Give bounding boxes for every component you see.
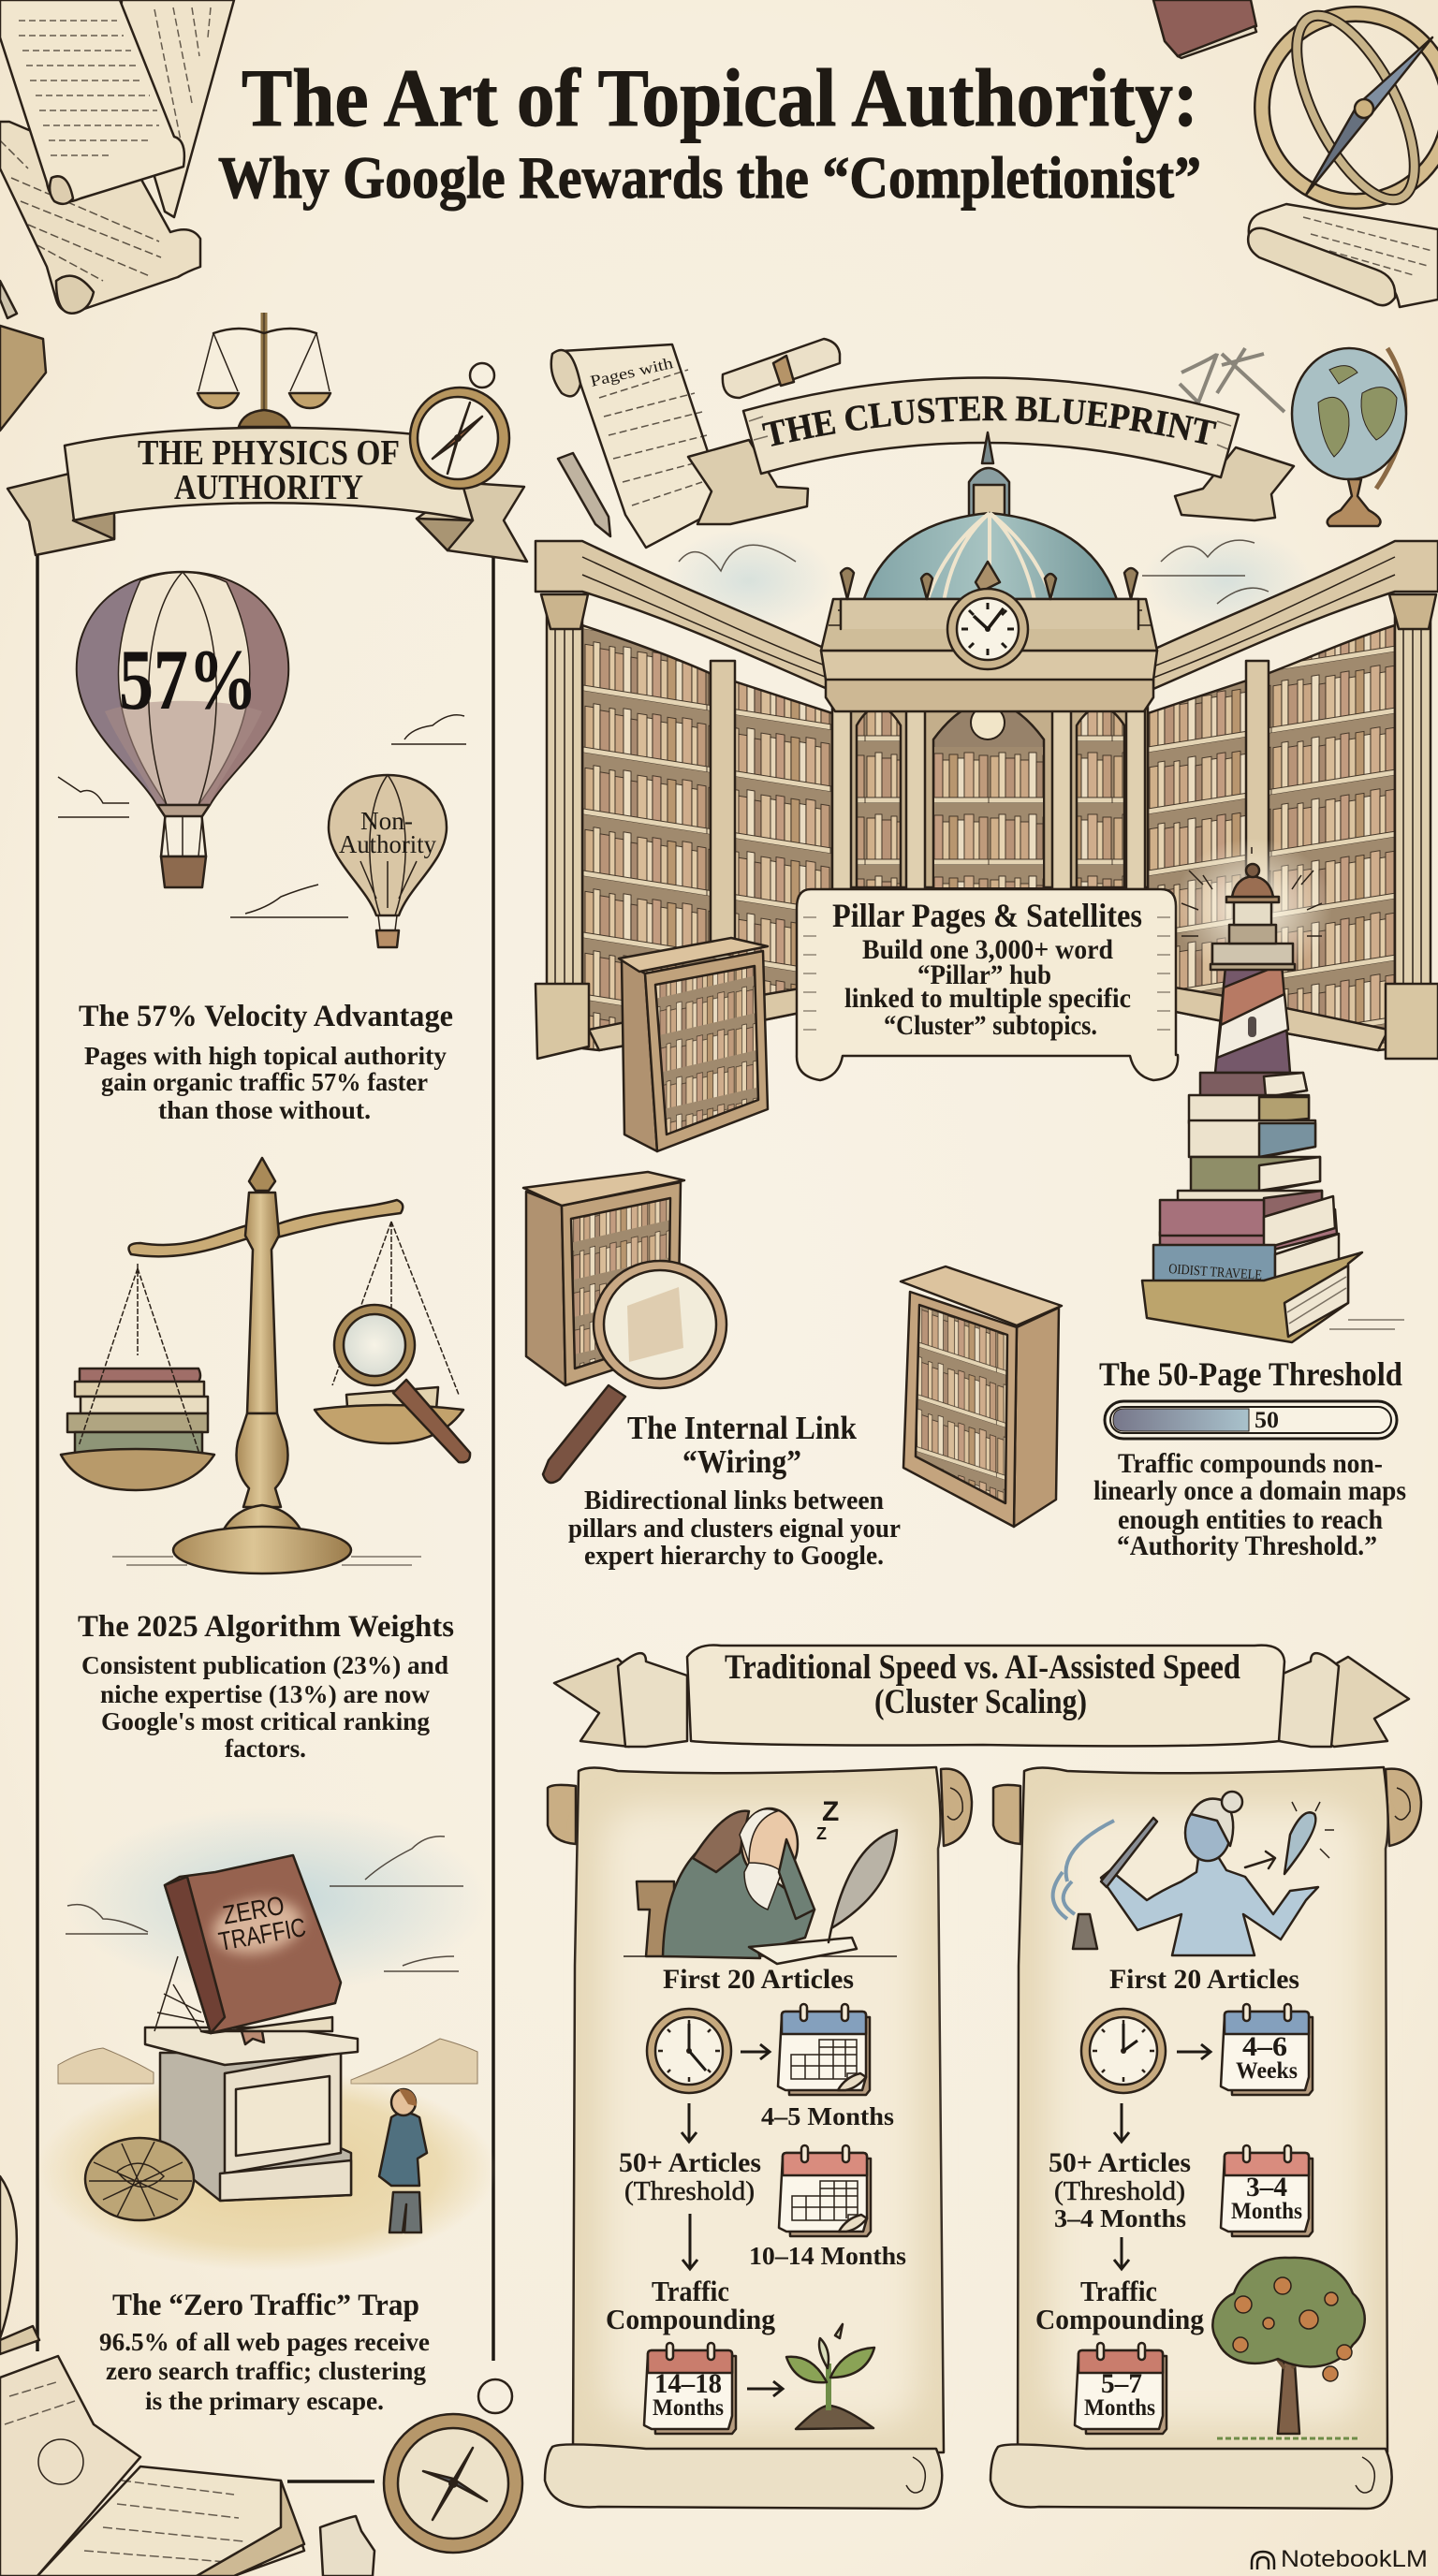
icon: tired scholar: Z	[822, 1796, 839, 1827]
illustration: central clock tower	[821, 562, 1157, 889]
panel: cluster blueprint library	[522, 337, 1438, 1571]
text: 57% velocity advantage	[79, 1000, 453, 1124]
decoration: page, diploma, pencil, calipers: Pages with	[589, 354, 675, 390]
text: 2025 algorithm weights: Google's most critical ranking	[101, 1707, 431, 1735]
scroll parchment	[545, 1767, 972, 2509]
heading banner: traditional vs AI-assisted speed: Traditional Speed vs. AI-Assisted Speed	[725, 1648, 1240, 1687]
icon: zero traffic book: TRAFFIC	[216, 1912, 308, 1956]
icon: lighthouse on a pile of books: OIDIST TRAVELE	[1168, 1262, 1263, 1283]
text: 2025 algorithm weights	[78, 1610, 454, 1763]
text and bar: 50-page threshold: The 50-Page Threshold	[1099, 1355, 1402, 1393]
callout: pillar pages and satellites: “Cluster” subtopics.	[884, 1010, 1097, 1041]
text: first 20 articles: First 20 Articles	[663, 1964, 854, 1995]
icon: calendar 14-18 months: Months	[653, 2395, 724, 2421]
icon: clock	[647, 2009, 731, 2093]
label: traffic compounding	[606, 2275, 775, 2335]
callout: pillar pages and satellites	[797, 889, 1178, 1080]
icon: calendar 4-6 weeks: Weeks	[1236, 2058, 1298, 2084]
text: 57% velocity advantage: than those without.	[158, 1096, 371, 1124]
scroll parchment	[990, 1767, 1421, 2509]
text: 2025 algorithm weights: factors.	[225, 1734, 306, 1763]
illustration: left library wing	[536, 541, 832, 1059]
pedestal	[145, 2027, 358, 2201]
logo: NotebookLM: NotebookLM	[1281, 2546, 1428, 2572]
text and bar: 50-page threshold: enough entities to reach	[1118, 1504, 1383, 1535]
panel border lines	[37, 538, 493, 2481]
text: internal link wiring: “Wiring”	[682, 1443, 801, 1480]
decoration: top-left scrolls and book	[0, 0, 234, 431]
icon: AI muse figure	[1053, 1792, 1334, 1955]
text: internal link wiring	[568, 1410, 901, 1571]
icon: balance scale with books and magnifier	[61, 1158, 470, 1573]
label: traffic compounding	[1035, 2275, 1204, 2335]
icon: cobweb	[154, 1956, 204, 2031]
panel: traditional speed scroll	[545, 1767, 972, 2509]
illustration: right library wing	[1148, 541, 1438, 1059]
text: zero traffic trap	[99, 2289, 430, 2415]
panel: the physics of authority	[7, 313, 527, 2481]
text: 57% velocity advantage: gain organic traffic 57% faster	[101, 1068, 428, 1096]
text: internal link wiring: The Internal Link	[627, 1410, 857, 1446]
text: internal link wiring: expert hierarchy to Google.	[584, 1541, 884, 1571]
text: zero traffic trap: is the primary escape.	[145, 2387, 384, 2415]
icon: small balance scale	[198, 313, 330, 427]
text: internal link wiring: Bidirectional links between	[584, 1486, 884, 1515]
icon: big balloon 57%: 57%	[119, 632, 257, 727]
icon: small balloon non-authority: Authority	[339, 830, 436, 858]
callout: pillar pages and satellites: linked to multiple specific	[844, 983, 1131, 1014]
icon: calendar 5-7 months: 5–7	[1101, 2368, 1142, 2399]
text: first 20 articles: First 20 Articles	[1109, 1964, 1299, 1995]
icon: calendar 5-7 months	[1075, 2343, 1167, 2434]
panel: AI-assisted speed scroll	[990, 1767, 1421, 2509]
icon: orange tree	[1212, 2258, 1365, 2438]
label: 50+ articles threshold 3-4 months: 50+ Articles	[1049, 2147, 1191, 2178]
label: traffic compounding: Compounding	[606, 2303, 775, 2335]
arrow: down	[1114, 2103, 1129, 2142]
callout: pillar pages and satellites: Pillar Pages & Satellites	[832, 897, 1142, 934]
heading banner: traditional vs AI-assisted speed	[554, 1646, 1409, 1747]
title: Why Google Rewards the “Completionist”	[218, 145, 1201, 211]
illustration: standalone bookcase 2	[523, 1172, 684, 1385]
label: 50+ articles threshold 3-4 months: 3–4 Months	[1054, 2204, 1186, 2232]
icon: clock	[1081, 2009, 1166, 2093]
icon: calendar 5-7 months: Months	[1084, 2395, 1155, 2421]
heading banner: the physics of authority: THE PHYSICS OF	[138, 433, 400, 473]
icon: calendar 3-4 months: Months	[1231, 2199, 1302, 2224]
heading banner: traditional vs AI-assisted speed: (Cluster Scaling)	[874, 1683, 1087, 1721]
text: zero traffic trap: zero search traffic; clustering	[106, 2357, 427, 2385]
icon: calendar 4-6 weeks: 4–6	[1242, 2031, 1287, 2062]
illustration: standalone bookcase 3	[901, 1266, 1062, 1527]
label: 50+ articles threshold: (Threshold)	[624, 2176, 755, 2206]
text: 57% velocity advantage: Pages with high topical authority	[84, 1042, 447, 1070]
icon: big balloon 57%	[77, 572, 288, 887]
text and bar: 50-page threshold	[1093, 1355, 1406, 1561]
icons: clouds around balloons	[58, 715, 466, 917]
label: 50+ articles threshold 3-4 months: (Threshold)	[1054, 2176, 1185, 2206]
arrow: clock to calendar	[1177, 2044, 1211, 2059]
label: 50+ articles threshold: 50+ Articles	[619, 2147, 761, 2178]
callout: pillar pages and satellites: Build one 3,000+ word	[862, 934, 1113, 965]
icon: sprout	[786, 2324, 874, 2429]
arrow: calendar to sprout	[747, 2381, 783, 2396]
arrow: down to compounding	[682, 2214, 697, 2269]
icon: big magnifying glass	[543, 1261, 726, 1483]
title	[218, 53, 1201, 211]
icon: zero traffic book	[165, 1855, 341, 2044]
text and bar: 50-page threshold: Traffic compounds non-	[1118, 1448, 1383, 1479]
icon: tired scholar: Z	[816, 1824, 827, 1843]
decoration: page, diploma, pencil, calipers	[551, 339, 1284, 548]
icon: calendar 14-18 months: 14–18	[654, 2368, 722, 2399]
text: 2025 algorithm weights: Consistent publication (23%) and	[81, 1651, 448, 1679]
icon: pocket compass	[410, 363, 509, 489]
icon: calendar 3-4 months	[1221, 2145, 1313, 2236]
icon: calendar 3-4 months: 3–4	[1246, 2172, 1287, 2203]
decoration: open book bottom left	[0, 2176, 304, 2576]
label: traffic compounding: Traffic	[652, 2275, 729, 2307]
illustration: zero traffic desert	[37, 1807, 496, 2271]
title: The Art of Topical Authority:	[242, 53, 1198, 144]
label: 10-14 months: 10–14 Months	[749, 2242, 906, 2270]
arrow: down to compounding	[1114, 2237, 1129, 2269]
text: zero traffic trap: 96.5% of all web pages receive	[99, 2328, 430, 2356]
heading banner: the cluster blueprint	[687, 376, 1296, 526]
icon: calendar 4-6 weeks	[1221, 2004, 1313, 2095]
icon: bottom pocket compass	[320, 2379, 522, 2576]
text: 2025 algorithm weights: The 2025 Algorithm Weights	[78, 1610, 454, 1644]
callout: pillar pages and satellites: “Pillar” hub	[917, 959, 1051, 990]
heading banner: the cluster blueprint: THE CLUSTER BLUEPRINT	[762, 396, 1217, 446]
icon: tired scholar	[624, 1796, 897, 1964]
illustration: dome and lantern	[856, 432, 1125, 640]
icon: lighthouse on a pile of books	[1142, 838, 1404, 1342]
illustration: standalone bookcase 1	[619, 938, 768, 1151]
text: zero traffic trap: The “Zero Traffic” Trap	[112, 2289, 419, 2322]
heading banner: the physics of authority: AUTHORITY	[174, 468, 363, 507]
text and bar: 50-page threshold: “Authority Threshold.”	[1117, 1530, 1377, 1561]
label: 50+ articles threshold	[619, 2147, 761, 2206]
label: traffic compounding: Compounding	[1035, 2303, 1204, 2335]
heading banner: the physics of authority	[7, 428, 527, 562]
arrow: clock to calendar	[741, 2044, 770, 2059]
arrow: down	[682, 2103, 697, 2142]
text: 57% velocity advantage: The 57% Velocity Advantage	[79, 1000, 453, 1033]
label: traffic compounding: Traffic	[1080, 2275, 1157, 2307]
label: 50+ articles threshold 3-4 months	[1049, 2147, 1191, 2232]
icon: tumbleweed	[85, 2138, 194, 2220]
icon: small man	[379, 2089, 427, 2232]
icon: small balloon non-authority	[329, 775, 447, 947]
icon: zero traffic book: ZERO	[221, 1891, 286, 1930]
text: 2025 algorithm weights: niche expertise (13%) are now	[100, 1680, 430, 1708]
icon: globe	[1292, 348, 1406, 526]
text: internal link wiring: pillars and clusters eignal your	[568, 1514, 901, 1544]
label: 4-5 months: 4–5 Months	[761, 2102, 894, 2130]
icon: calendar 14-18 months	[644, 2343, 736, 2434]
icon: calendar 10-14 months	[779, 2145, 871, 2236]
text and bar: 50-page threshold: linearly once a domain maps	[1093, 1475, 1406, 1506]
clouds behind dome	[665, 529, 1311, 632]
text and bar: 50-page threshold: 50	[1255, 1408, 1279, 1433]
icon: calendar 4-5 months	[778, 2004, 870, 2095]
icon: small balloon non-authority: Non-	[360, 807, 413, 835]
decoration: top-right red book, armillary sphere and scroll	[1153, 0, 1438, 307]
